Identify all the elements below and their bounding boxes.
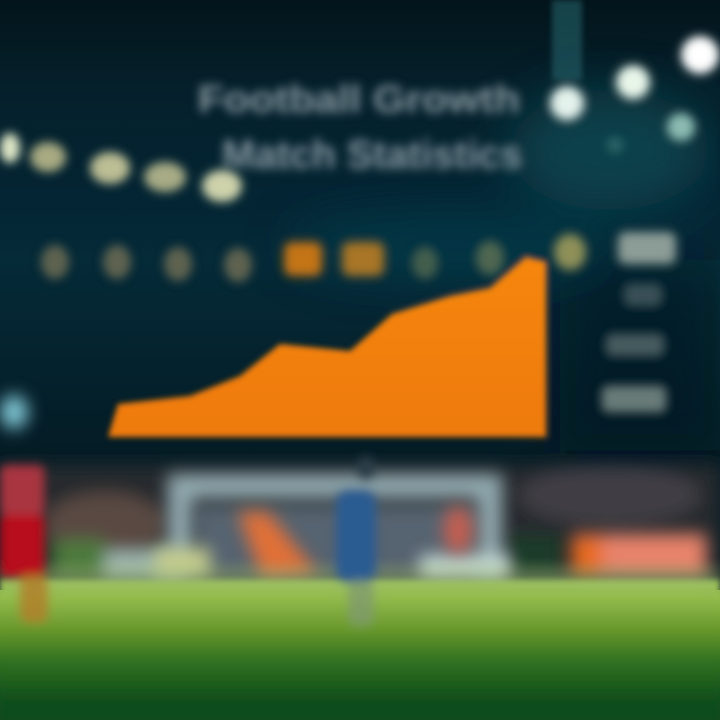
orange area chart bbox=[108, 257, 546, 437]
floodlights left bbox=[0, 133, 242, 202]
title bbox=[198, 79, 522, 177]
floodlights right bbox=[550, 36, 719, 153]
grass base bbox=[0, 590, 720, 720]
player in blue bbox=[336, 456, 376, 626]
teal glow bbox=[290, 90, 720, 450]
grass pitch bbox=[0, 580, 720, 720]
floodlight mast bbox=[552, 0, 582, 80]
player in red bbox=[0, 465, 48, 623]
column labels row bbox=[41, 234, 586, 282]
left glow bbox=[0, 395, 28, 429]
right axis labels bbox=[602, 232, 676, 412]
orange banner bbox=[572, 534, 706, 576]
crowd bbox=[0, 465, 720, 585]
pitch horizon blur bbox=[0, 570, 720, 586]
title: Match Statistics bbox=[222, 133, 522, 177]
goal bbox=[155, 486, 510, 579]
title: Football Growth bbox=[198, 79, 520, 121]
